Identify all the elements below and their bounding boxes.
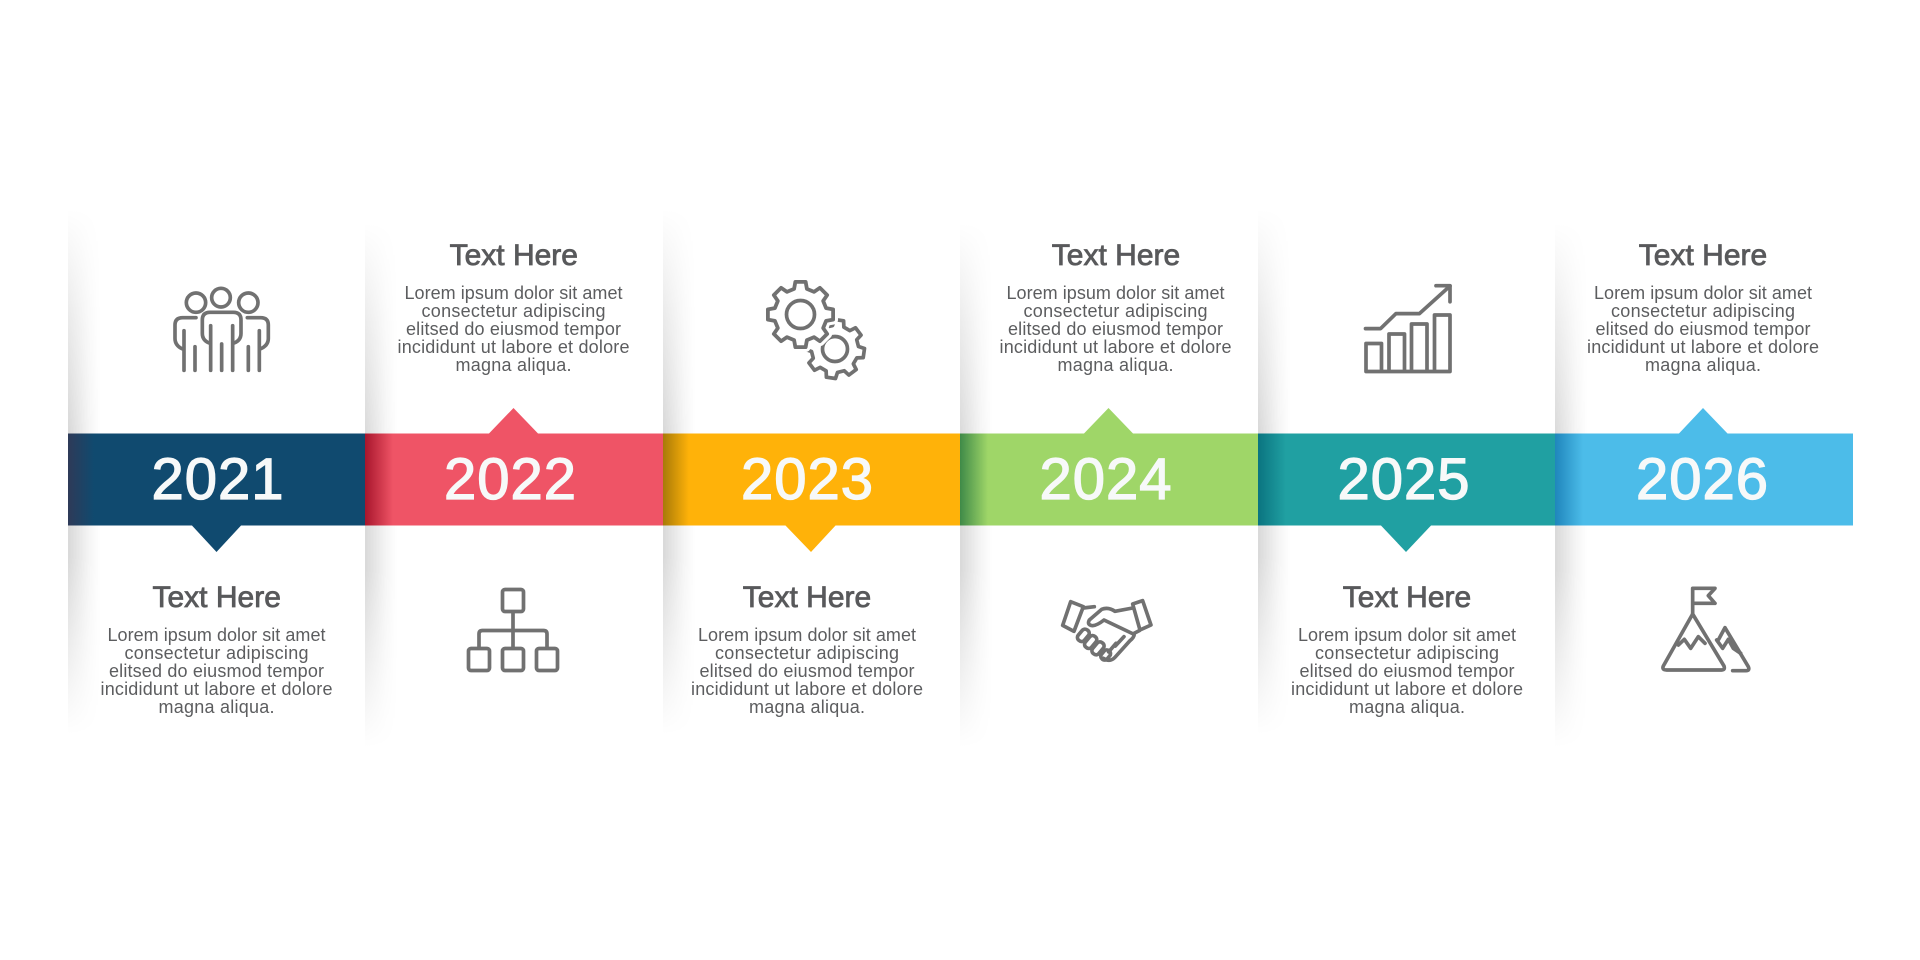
body text 2025: incididunt ut labore et dolore	[1291, 679, 1523, 699]
year band 2023	[663, 434, 960, 552]
year 2022: 2022	[444, 447, 577, 512]
year 2021: 2021	[151, 447, 285, 512]
icon: growth chart	[1366, 286, 1450, 372]
body text 2023: consectetur adipiscing	[715, 643, 899, 663]
panel: 2025	[1258, 253, 1555, 717]
icon: mountain flag	[1663, 588, 1749, 671]
body text 2022: consectetur adipiscing	[422, 301, 606, 321]
year band 2022	[365, 408, 663, 526]
body text 2024	[1000, 283, 1232, 375]
body text 2024: incididunt ut labore et dolore	[1000, 337, 1232, 357]
icon: handshake	[1063, 601, 1151, 661]
heading 2023: Text Here	[743, 581, 871, 614]
body text 2026: consectetur adipiscing	[1611, 301, 1795, 321]
year 2024: 2024	[1039, 447, 1173, 512]
body text 2021: consectetur adipiscing	[124, 643, 308, 663]
body text 2022: elitsed do eiusmod tempor	[406, 319, 621, 339]
year band 2024	[960, 408, 1258, 526]
body text 2025: consectetur adipiscing	[1315, 643, 1499, 663]
heading 2024: Text Here	[1052, 239, 1180, 272]
body text 2024: elitsed do eiusmod tempor	[1008, 319, 1223, 339]
heading 2026: Text Here	[1639, 239, 1767, 272]
body text 2026: incididunt ut labore et dolore	[1587, 337, 1819, 357]
body text 2026: elitsed do eiusmod tempor	[1596, 319, 1810, 339]
body text 2025: magna aliqua.	[1349, 697, 1465, 717]
body text 2026: Lorem ipsum dolor sit amet	[1594, 283, 1812, 303]
year band 2026	[1555, 408, 1853, 526]
body text 2025: Lorem ipsum dolor sit amet	[1298, 625, 1516, 645]
heading 2021: Text Here	[153, 581, 281, 614]
body text 2023: incididunt ut labore et dolore	[691, 679, 923, 699]
body text 2026: magna aliqua.	[1645, 355, 1761, 375]
panel: 2024	[960, 222, 1258, 748]
body text 2021	[100, 625, 332, 717]
year 2023: 2023	[741, 447, 874, 512]
panel: 2026	[1555, 244, 1853, 707]
body text 2025: elitsed do eiusmod tempor	[1300, 661, 1514, 681]
year band 2025	[1258, 434, 1555, 552]
body text 2022: magna aliqua.	[456, 355, 572, 375]
body text 2023: elitsed do eiusmod tempor	[700, 661, 914, 681]
body text 2021: elitsed do eiusmod tempor	[109, 661, 324, 681]
icon: people	[175, 288, 268, 370]
body text 2021: magna aliqua.	[158, 697, 274, 717]
year 2026: 2026	[1636, 447, 1769, 512]
body text 2022: incididunt ut labore et dolore	[398, 337, 630, 357]
year 2025: 2025	[1337, 447, 1471, 512]
body text 2022	[398, 283, 630, 375]
year band 2021	[68, 434, 365, 552]
body text 2024: magna aliqua.	[1058, 355, 1174, 375]
panel: 2021	[68, 208, 365, 735]
body text 2022: Lorem ipsum dolor sit amet	[404, 283, 622, 303]
heading 2025: Text Here	[1343, 581, 1471, 614]
body text 2025	[1291, 625, 1523, 717]
body text 2024: Lorem ipsum dolor sit amet	[1006, 283, 1224, 303]
body text 2024: consectetur adipiscing	[1024, 301, 1208, 321]
body text 2023	[691, 625, 923, 717]
icon: gears	[768, 282, 868, 382]
heading 2022: Text Here	[450, 239, 578, 272]
body text 2023: magna aliqua.	[749, 697, 865, 717]
body text 2021: incididunt ut labore et dolore	[100, 679, 332, 699]
panel: 2022	[365, 244, 663, 707]
body text 2026	[1587, 283, 1819, 375]
body text 2021: Lorem ipsum dolor sit amet	[108, 625, 326, 645]
body text 2023: Lorem ipsum dolor sit amet	[698, 625, 916, 645]
icon: org chart	[468, 590, 558, 670]
panel: 2023	[663, 208, 960, 735]
